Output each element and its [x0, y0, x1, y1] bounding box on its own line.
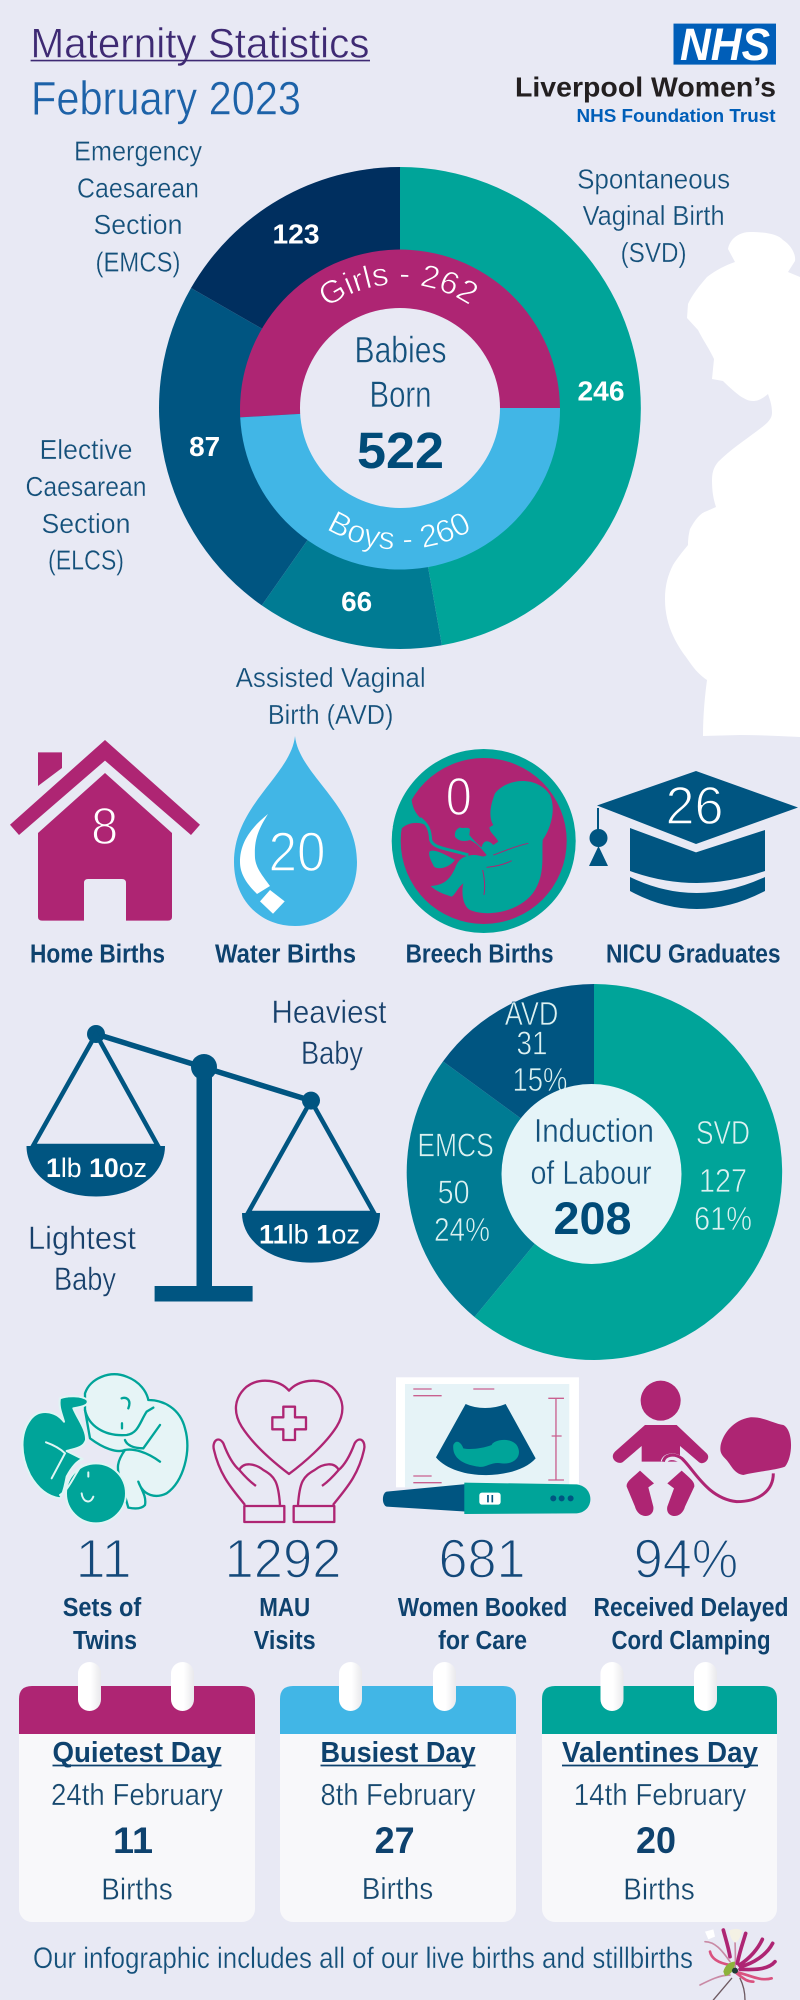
values: SVD	[694, 1114, 752, 1237]
icon: breech births: 0	[446, 767, 472, 827]
label: lightest baby: Lightest	[28, 1220, 136, 1256]
panel: quietest day calendar: Births	[101, 1872, 173, 1907]
ring: girls	[240, 250, 560, 417]
values: EMCS	[417, 1126, 494, 1248]
values: AVD: 15%	[512, 1061, 568, 1098]
panel: induction of labour donut chart	[407, 984, 782, 1360]
label: NICU graduates: NICU Graduates	[606, 941, 781, 969]
label: home births: Home Births	[30, 941, 165, 969]
label: lightest baby	[28, 1220, 136, 1297]
stat: sets of twins: Twins	[73, 1627, 137, 1655]
panel: quietest day calendar	[19, 1662, 255, 1922]
stat: MAU visits: 1292	[224, 1528, 342, 1590]
panel: quietest day calendar: Quietest Day	[52, 1737, 222, 1769]
values: EMCS: 24%	[434, 1211, 490, 1248]
label: SVD	[577, 163, 730, 268]
panel: quietest day calendar: 24th February	[51, 1777, 223, 1812]
logo: NHS Liverpool Women's: NHS	[680, 19, 770, 70]
centre: induction total	[502, 1084, 682, 1264]
stat: women booked for care: 681	[438, 1528, 526, 1590]
label: AVD	[236, 662, 426, 730]
stat: sets of twins: 11	[76, 1528, 132, 1590]
label: heaviest baby	[272, 994, 387, 1071]
panel: busiest day calendar: Busiest Day	[320, 1737, 476, 1769]
centre total: 522	[357, 422, 444, 479]
centre total: Born	[370, 374, 432, 415]
label: EMCS	[74, 136, 202, 277]
logo: NHS Liverpool Women's: NHS Foundation Trust	[576, 105, 776, 126]
silhouette: pregnant woman	[665, 232, 800, 737]
label: ELCS: Elective	[40, 434, 132, 465]
stat: sets of twins	[63, 1528, 142, 1655]
stat: women booked for care: for Care	[438, 1627, 527, 1655]
stat: MAU visits: MAU	[259, 1594, 310, 1622]
segment: spontaneous vaginal birth	[400, 167, 641, 645]
label: heaviest baby: Heaviest	[272, 994, 387, 1030]
label: SVD: (SVD)	[621, 237, 687, 268]
icon: water births	[234, 736, 357, 926]
label: EMCS: Section	[94, 209, 182, 240]
ring: boys	[240, 408, 560, 570]
icon: delayed cord clamping	[613, 1381, 791, 1516]
panel: births donut chart	[159, 167, 641, 649]
icon: twins	[22, 1374, 187, 1523]
centre: induction total: Induction	[534, 1112, 654, 1149]
label: girls: Girls - 262	[320, 266, 477, 304]
icon: heart in hands	[214, 1381, 364, 1522]
footer note: Our infographic includes all of our live births and stillbirths	[33, 1942, 693, 1975]
value: heaviest weight: 11lb 1oz	[259, 1220, 360, 1250]
stat: women booked for care: Women Booked	[398, 1594, 567, 1622]
label: EMCS: (EMCS)	[96, 246, 180, 277]
label: ELCS: Caesarean	[26, 471, 146, 502]
values: SVD: 127	[699, 1162, 747, 1199]
panel: valentines day calendar	[542, 1662, 777, 1922]
value: 123: 123	[272, 218, 320, 250]
label: EMCS: Caesarean	[77, 172, 199, 203]
values: EMCS: EMCS	[417, 1126, 494, 1164]
label: SVD: Spontaneous	[577, 163, 730, 194]
values: AVD	[505, 995, 568, 1098]
panel: busiest day calendar: Births	[362, 1871, 433, 1906]
stat: sets of twins: Sets of	[63, 1594, 142, 1622]
panel: valentines day calendar: Valentines Day	[562, 1737, 758, 1769]
icon: ultrasound scan	[383, 1377, 590, 1514]
stat: MAU visits	[224, 1528, 342, 1655]
icon: breech births	[392, 749, 576, 933]
label: EMCS: Emergency	[74, 136, 202, 166]
panel: busiest day calendar	[280, 1662, 516, 1922]
stat: MAU visits: Visits	[254, 1627, 316, 1655]
values: AVD: 31	[516, 1024, 548, 1062]
title: Maternity Statistics	[30, 20, 370, 67]
segment: elective caesarean	[159, 288, 400, 605]
values: SVD: SVD	[696, 1114, 750, 1151]
label: heaviest baby: Baby	[301, 1035, 363, 1071]
label: water births: Water Births	[215, 941, 356, 969]
values: EMCS: 50	[438, 1174, 470, 1210]
panel: valentines day calendar: 20	[636, 1820, 676, 1861]
logo: NHS Liverpool Women's: Liverpool Women’s	[515, 72, 776, 103]
value: 87: 87	[189, 431, 220, 462]
panel: busiest day calendar: 8th February	[320, 1777, 476, 1812]
segment: emergency caesarean	[191, 167, 400, 408]
stat: delayed cord clamping: Cord Clamping	[612, 1627, 770, 1655]
label: AVD: Assisted Vaginal	[236, 662, 426, 693]
icon: NICU graduates: 26	[666, 776, 724, 836]
value: lightest weight: 1lb 10oz	[46, 1153, 147, 1183]
icon: NICU graduates	[589, 771, 798, 909]
label: boys: Boys - 260	[328, 511, 468, 552]
value: 246: 246	[578, 376, 624, 407]
stat: delayed cord clamping	[594, 1528, 788, 1655]
panel: valentines day calendar: 14th February	[574, 1777, 747, 1812]
stat: women booked for care	[398, 1528, 567, 1655]
centre total	[354, 329, 446, 479]
segment: SVD	[474, 984, 782, 1360]
value: 66: 66	[341, 586, 372, 617]
values: SVD: 61%	[694, 1200, 752, 1237]
label: ELCS: (ELCS)	[48, 545, 124, 576]
icon: weighing scales	[26, 1025, 380, 1302]
icon: home births	[10, 740, 200, 921]
label: ELCS	[26, 434, 146, 576]
icon: home births: 8	[91, 798, 118, 856]
icon: honeysuckle flower	[700, 1929, 775, 2000]
centre total: Babies	[354, 329, 446, 370]
panel: valentines day calendar: Births	[623, 1872, 695, 1907]
panel: busiest day calendar: 27	[375, 1820, 415, 1861]
segment: AVD	[443, 984, 594, 1172]
panel: quietest day calendar: 11	[113, 1820, 153, 1861]
label: ELCS: Section	[42, 508, 130, 539]
label: breech births: Breech Births	[406, 941, 554, 969]
centre: induction total: 208	[554, 1193, 632, 1244]
label: lightest baby: Baby	[54, 1261, 116, 1297]
icon: water births: 20	[268, 820, 326, 883]
stat: delayed cord clamping: 94%	[634, 1528, 738, 1590]
segment: assisted vaginal birth	[262, 408, 442, 649]
values: AVD: AVD	[505, 995, 558, 1032]
logo: NHS Liverpool Women's	[515, 19, 776, 126]
label: SVD: Vaginal Birth	[583, 200, 725, 231]
subtitle: month: February 2023	[31, 72, 301, 125]
centre hole	[300, 308, 500, 508]
centre: induction total: of Labour	[530, 1154, 652, 1191]
label: AVD: Birth (AVD)	[268, 699, 393, 730]
segment: EMCS	[407, 1061, 594, 1317]
